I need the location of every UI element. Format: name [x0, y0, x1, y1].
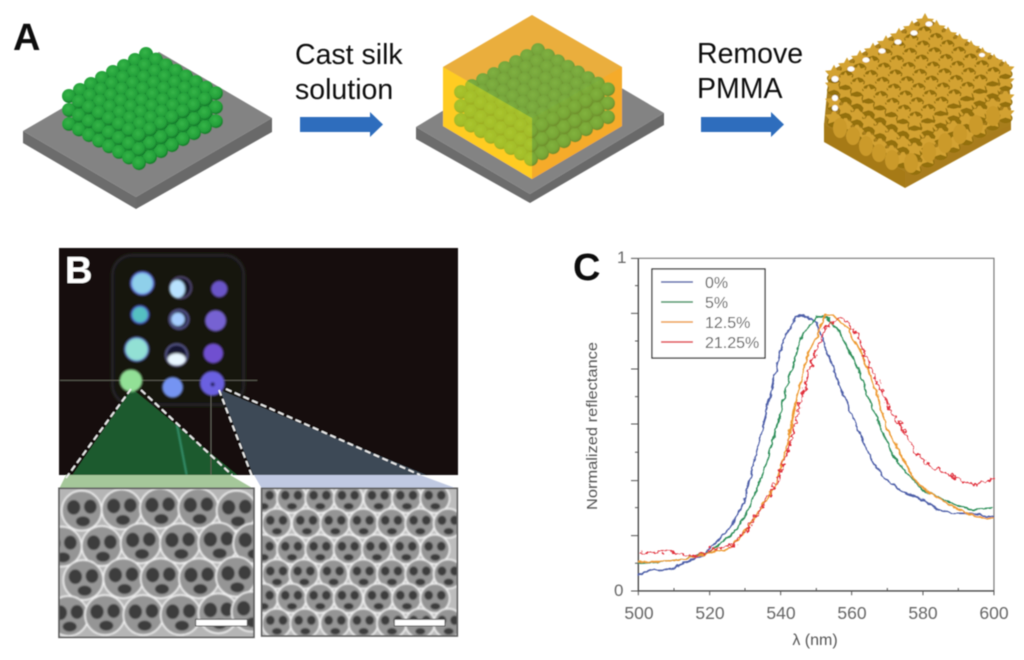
photograph of patterned film [59, 248, 458, 497]
label C: C [573, 247, 600, 289]
light green wedge strip [59, 475, 254, 489]
curve 5% [638, 317, 994, 563]
panel C: reflectance chart [573, 247, 1009, 649]
scale bar left [196, 619, 247, 626]
panel A: fabrication process [13, 13, 1014, 209]
step 1: PMMA sphere opal on substrate [23, 47, 272, 209]
light blue wedge strip [254, 475, 458, 489]
x axis tick labels: 500 [624, 603, 654, 623]
blue zoom wedge [220, 390, 426, 476]
label B: B [65, 250, 92, 292]
legend: 12.5% [705, 315, 750, 332]
micrograph left [58, 486, 256, 639]
text: Cast silk solution: solution [295, 74, 393, 106]
x axis tick labels: 540 [766, 603, 796, 623]
arrow 2 [701, 112, 784, 137]
x axis tick labels: 600 [979, 603, 1009, 623]
curve 0% [638, 315, 994, 575]
y axis tick labels: 0 [614, 581, 623, 600]
text: Remove PMMA: Remove [697, 38, 803, 70]
text: Cast silk solution: Cast silk [295, 39, 403, 71]
curve 12.5% [638, 315, 994, 562]
x axis tick labels: 560 [837, 603, 867, 623]
dashed zoom lines [66, 389, 420, 478]
y axis tick labels [614, 248, 626, 600]
y axis title: Normalized reflectance [585, 342, 601, 510]
legend: 21.25% [705, 335, 759, 352]
x axis tick labels: 520 [695, 603, 725, 623]
panel B: photograph and micrographs [42, 248, 463, 638]
legend: 5% [705, 295, 728, 312]
arrow 1 [300, 112, 383, 137]
micrograph right [249, 484, 463, 638]
x axis tick labels [624, 603, 1009, 623]
scale bar right [394, 619, 445, 626]
reflectance curves [638, 315, 994, 575]
y axis tick labels: 1 [617, 248, 626, 267]
green zoom wedge [72, 390, 238, 476]
x axis tick labels: 580 [908, 603, 938, 623]
step 2: silk cast over opal [416, 15, 664, 203]
x axis title: λ (nm) [792, 632, 838, 649]
legend: 0% [705, 275, 728, 292]
text: Remove PMMA: PMMA [697, 73, 782, 105]
legend [652, 269, 765, 358]
step 3: silk inverse opal [824, 13, 1014, 188]
curve 21.25% [638, 317, 994, 557]
plot frame and ticks [631, 258, 994, 595]
label A: A [13, 17, 40, 59]
